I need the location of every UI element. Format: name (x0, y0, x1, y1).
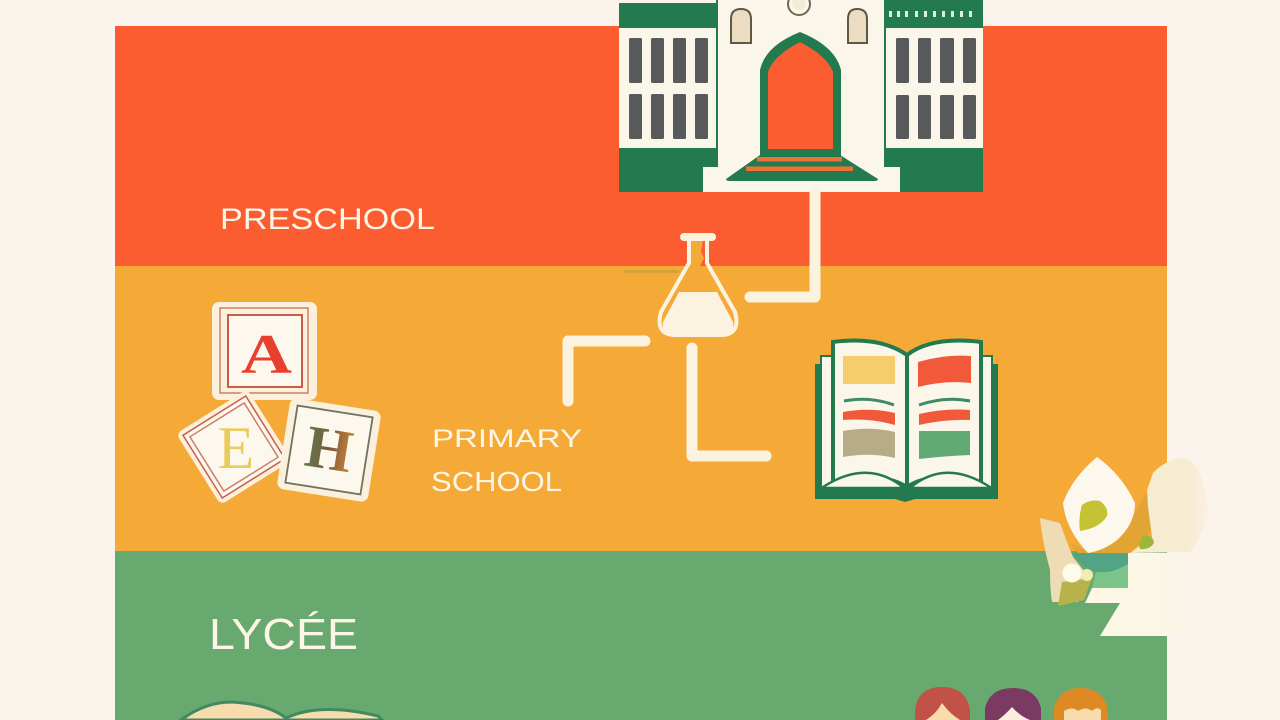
round window (788, 0, 810, 15)
icon: alphabet blocks (176, 302, 382, 505)
left wing windows (629, 38, 708, 139)
door (760, 32, 841, 156)
heading: primary school: SCHOOL (431, 466, 562, 497)
icon: flowers and figure (1040, 457, 1208, 636)
cornice dots (889, 11, 972, 17)
block A (212, 302, 317, 400)
student 1 (915, 687, 970, 720)
arrow: building to flask (750, 192, 815, 297)
panel: preschool band (115, 26, 1167, 266)
arrow: flask to primary school (568, 341, 645, 401)
block E: E (218, 415, 254, 481)
icon: school building (619, 0, 983, 192)
right page blocks (918, 356, 971, 387)
arched windows (731, 9, 751, 43)
panel: primary school band (115, 266, 1167, 551)
arrow: flask to book (692, 348, 766, 456)
left page blocks (843, 356, 895, 384)
heading: primary school (431, 425, 582, 497)
heading: lycee: LYCÉE (209, 610, 358, 659)
block A: A (241, 324, 293, 386)
steps (726, 155, 878, 181)
icon: students (915, 687, 1108, 720)
student 3 (1054, 688, 1108, 720)
icon: open book (815, 341, 998, 502)
right wing windows (896, 38, 976, 139)
icon: open book at bottom left (181, 702, 382, 720)
heading: preschool: PRESCHOOL (220, 203, 435, 236)
icon: flask (624, 233, 737, 336)
block E (176, 389, 292, 505)
heading: primary school: PRIMARY (432, 425, 582, 453)
panel: lycee band (115, 551, 1167, 720)
student 2 (985, 688, 1041, 720)
block H (276, 397, 382, 503)
block H: H (301, 413, 357, 485)
